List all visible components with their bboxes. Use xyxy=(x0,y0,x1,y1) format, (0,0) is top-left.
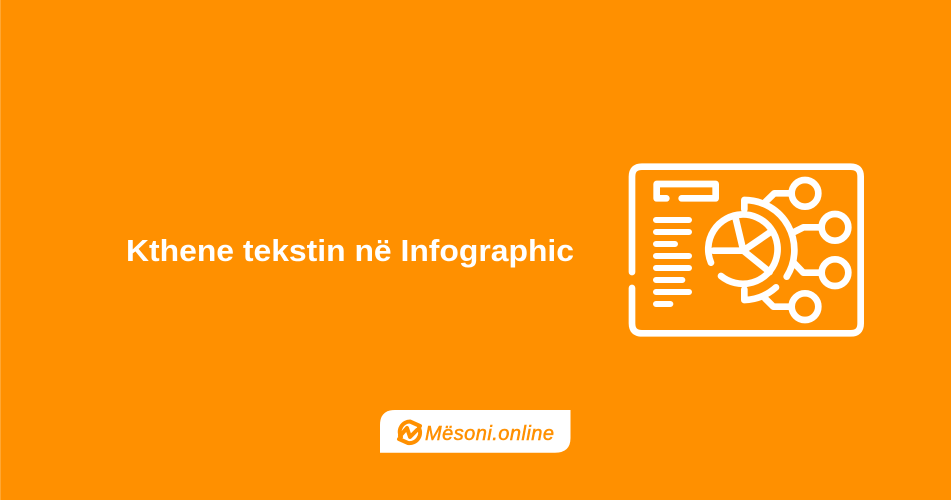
connector nodes xyxy=(765,180,848,320)
logo badge xyxy=(380,410,570,453)
title: Kthene tekstin në Infographic xyxy=(126,234,574,268)
gear arc xyxy=(744,200,794,300)
logo icon xyxy=(399,422,420,443)
board frame xyxy=(632,167,861,333)
text lines xyxy=(656,220,689,304)
icon: presentation board with pie chart xyxy=(632,167,861,333)
title box xyxy=(657,184,716,198)
pie chart xyxy=(708,214,778,284)
logo wordmark: Mësoni.online xyxy=(425,423,554,445)
